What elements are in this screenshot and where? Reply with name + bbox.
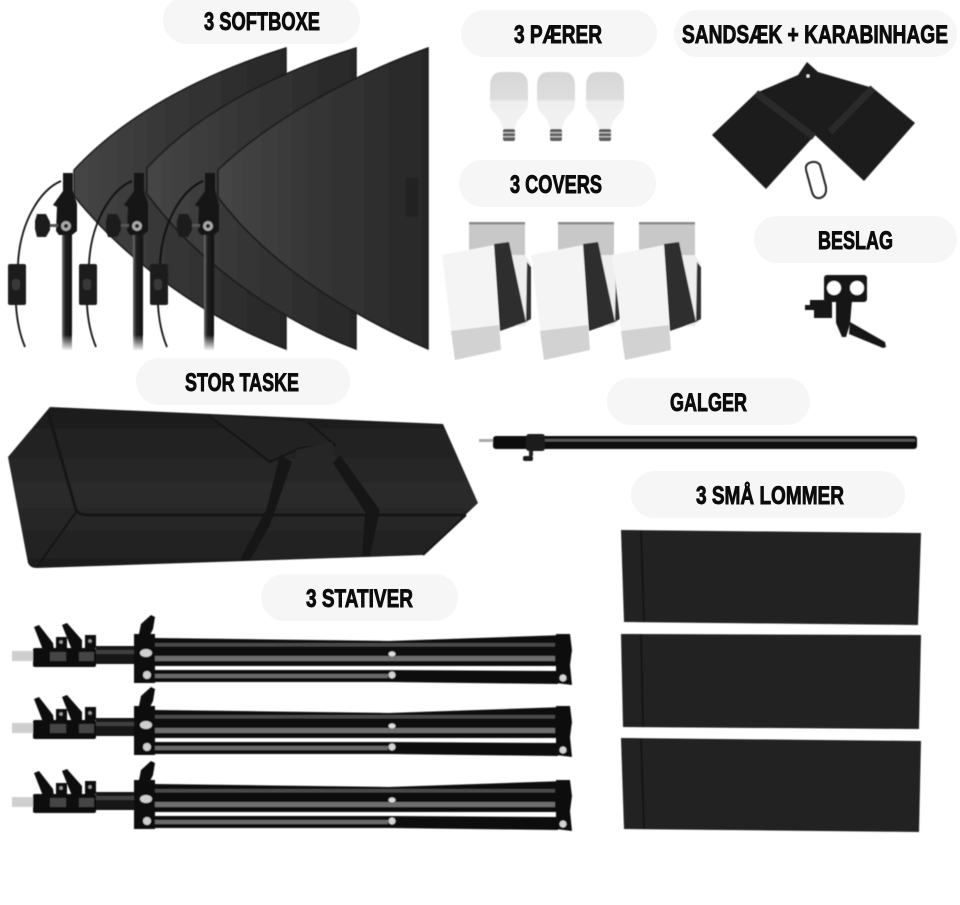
icon: bulb 1: [490, 72, 528, 141]
stand front: [150, 173, 219, 351]
softbox middle: [147, 48, 356, 349]
heading: 3 små lommer: 3 SMÅ LOMMER: [696, 481, 844, 510]
heading: sandsæk + karabinhage: [674, 10, 957, 57]
icon: bulb 3: [586, 72, 624, 141]
heading: 3 stativer: [261, 574, 458, 621]
tripod 1: [12, 615, 572, 685]
icon: bulb 2: [537, 72, 575, 141]
icon: bracket: [805, 275, 886, 348]
heading: stor taske: STOR TASKE: [185, 369, 299, 397]
panel: covers: [442, 160, 701, 360]
boom arm: [479, 434, 917, 461]
heading: beslag: BESLAG: [818, 227, 893, 255]
stand middle: [79, 173, 148, 351]
pocket 1: [621, 530, 921, 625]
softbox label patch: [406, 178, 418, 217]
tripod 3: [12, 761, 572, 831]
stand back: [8, 173, 77, 351]
heading: 3 covers: [459, 160, 656, 207]
panel: bulbs: [461, 10, 657, 141]
cover 1: [442, 222, 531, 360]
panel: softboxes: [8, 0, 428, 351]
panel: bracket: [754, 216, 957, 348]
heading: beslag: [754, 216, 957, 263]
panel: small pockets: [621, 471, 921, 832]
softbox front: [218, 48, 428, 349]
pocket 2: [621, 634, 921, 729]
panel: large bag: [8, 358, 478, 568]
heading: stor taske: [136, 358, 350, 405]
heading: 3 stativer: 3 STATIVER: [306, 585, 413, 613]
heading: 3 pærer: [461, 10, 657, 57]
pocket 3: [621, 738, 921, 832]
heading: 3 softboxe: [163, 0, 360, 44]
heading: 3 små lommer: [631, 471, 905, 518]
softbox back: [74, 48, 286, 349]
heading: galger: GALGER: [670, 389, 747, 417]
panel: boom arm: [479, 378, 917, 461]
heading: 3 softboxe: 3 SOFTBOXE: [204, 8, 320, 36]
cover 3: [612, 222, 701, 360]
tripod 2: [12, 687, 572, 757]
heading: 3 pærer: 3 PÆRER: [514, 21, 602, 49]
panel: stands: [12, 574, 572, 831]
heading: 3 covers: 3 COVERS: [510, 171, 602, 199]
panel: sandbag and carabiner: [674, 10, 957, 198]
icon: carabiner: [806, 162, 826, 198]
cover 2: [531, 222, 620, 360]
bag: [8, 407, 478, 568]
heading: galger: [607, 378, 810, 425]
sandbag: [712, 62, 915, 189]
